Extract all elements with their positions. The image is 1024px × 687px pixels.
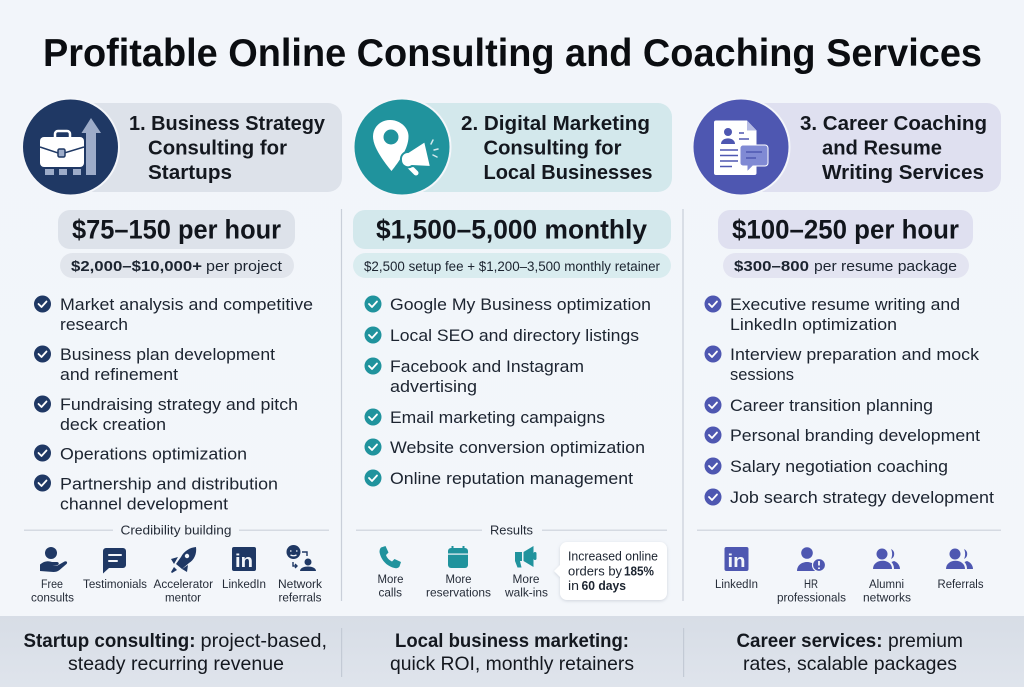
icon: hr professionals: professionals bbox=[777, 590, 846, 604]
service list: digital marketing: Email marketing campaigns bbox=[390, 408, 605, 427]
header: digital marketing bbox=[352, 98, 672, 196]
icon: accelerator mentor: Accelerator bbox=[154, 577, 213, 591]
service list: career coaching: Interview preparation and mock bbox=[730, 345, 980, 364]
service list: digital marketing: advertising bbox=[390, 377, 477, 396]
icon: accelerator mentor bbox=[154, 547, 213, 604]
service list: business strategy: Fundraising strategy and pitch bbox=[60, 395, 298, 414]
service list: digital marketing: Local SEO and directory listings bbox=[390, 326, 639, 345]
service list: career coaching: LinkedIn optimization bbox=[730, 315, 897, 334]
icon: network referrals bbox=[278, 545, 323, 604]
icon: accelerator mentor: mentor bbox=[165, 590, 201, 604]
heading: business strategy bbox=[129, 112, 326, 184]
footer: startup consulting: project-based, bbox=[200, 630, 327, 652]
icon: linkedin: in bbox=[728, 551, 746, 571]
footer: career services bbox=[736, 630, 963, 675]
callout: increased online orders: in bbox=[568, 579, 579, 593]
price: setup fee and retainer: $2,500 setup fee + $1,200–3,500 monthly retainer bbox=[364, 259, 660, 274]
icon: referrals: Referrals bbox=[938, 577, 984, 591]
icon: resume and chat bubble bbox=[692, 98, 790, 196]
service list: career coaching: Salary negotiation coaching bbox=[730, 457, 948, 476]
footer: career services: rates, scalable packages bbox=[743, 653, 957, 675]
header: career coaching bbox=[692, 98, 1001, 196]
service list: business strategy: Business plan development bbox=[60, 345, 275, 364]
footer: startup consulting bbox=[24, 630, 327, 675]
heading: career coaching: Writing Services bbox=[822, 161, 984, 184]
icon: more walk-ins bbox=[504, 546, 548, 600]
heading: digital marketing: Local Businesses bbox=[484, 161, 652, 184]
icon: alumni networks bbox=[863, 548, 911, 604]
service list: digital marketing bbox=[364, 295, 651, 488]
heading: business strategy: 1. Business Strategy bbox=[129, 112, 326, 135]
icon: testimonials bbox=[83, 548, 147, 591]
service list: career coaching: Personal branding development bbox=[730, 426, 980, 445]
footer: startup consulting: steady recurring revenue bbox=[68, 653, 284, 675]
price: setup fee and retainer bbox=[353, 253, 671, 278]
icon: map pin and megaphone bbox=[352, 98, 452, 196]
icon: more reservations bbox=[426, 546, 491, 600]
price: resume package: $300–800 bbox=[734, 258, 809, 275]
price: resume package: per resume package bbox=[814, 258, 957, 275]
service list: business strategy bbox=[34, 295, 313, 514]
service list: career coaching: Executive resume writing and bbox=[730, 295, 960, 314]
heading: business strategy: Consulting for bbox=[148, 136, 287, 160]
icon: free consults: consults bbox=[31, 590, 74, 604]
heading: career coaching bbox=[800, 112, 987, 184]
icon: hr professionals bbox=[777, 547, 846, 604]
service list: digital marketing: Google My Business optimization bbox=[390, 295, 651, 314]
panel: career coaching and resume writing bbox=[692, 98, 1001, 604]
price: monthly rate: $1,500–5,000 monthly bbox=[376, 214, 647, 244]
footer: career services: premium bbox=[888, 630, 963, 652]
service list: business strategy: channel development bbox=[60, 494, 228, 514]
heading: digital marketing: 2. Digital Marketing bbox=[461, 112, 650, 135]
callout: increased online orders: orders by bbox=[568, 564, 623, 578]
icon: alumni networks: Alumni bbox=[869, 577, 904, 591]
panel: business strategy consulting bbox=[21, 98, 342, 604]
price: monthly rate bbox=[353, 210, 671, 249]
icon: hr professionals: HR bbox=[804, 577, 818, 591]
icon: linkedin: in bbox=[235, 551, 253, 571]
footer: local business marketing: quick ROI, monthly retainers bbox=[390, 653, 634, 675]
icon: linkedin bbox=[715, 547, 758, 591]
icon: more reservations: More bbox=[446, 572, 472, 586]
icon: alumni networks: networks bbox=[863, 590, 911, 604]
icon: testimonials: Testimonials bbox=[83, 577, 147, 591]
icon: more calls: More bbox=[378, 572, 404, 586]
footer: local business marketing bbox=[390, 630, 634, 675]
icon: more calls bbox=[378, 546, 404, 600]
service list: career coaching bbox=[704, 295, 994, 507]
heading: career coaching: and Resume bbox=[822, 136, 942, 160]
section: credibility building: Credibility building bbox=[120, 522, 232, 538]
icon: more reservations: reservations bbox=[426, 586, 491, 600]
footer: career services: Career services: bbox=[736, 630, 882, 652]
section: career channels bbox=[697, 530, 1001, 604]
section: results: Results bbox=[490, 522, 533, 538]
icon: linkedin: LinkedIn bbox=[715, 577, 758, 591]
icon: network referrals: Network bbox=[278, 577, 323, 591]
price: resume package bbox=[723, 253, 969, 278]
icon: more calls: calls bbox=[378, 586, 402, 600]
service list: career coaching: sessions bbox=[730, 365, 794, 384]
service list: career coaching: Job search strategy development bbox=[730, 488, 994, 507]
footer: startup consulting: Startup consulting: bbox=[24, 630, 196, 652]
panel: digital marketing consulting bbox=[352, 98, 672, 600]
heading: digital marketing: Consulting for bbox=[484, 136, 622, 160]
heading: digital marketing bbox=[461, 112, 652, 184]
service list: career coaching: Career transition planning bbox=[730, 396, 933, 415]
icon: referrals bbox=[938, 548, 984, 591]
heading: business strategy: Startups bbox=[148, 161, 232, 184]
callout: increased online orders: Increased online bbox=[568, 550, 658, 564]
icon: linkedin: LinkedIn bbox=[222, 577, 266, 591]
price: hourly rate: $75–150 per hour bbox=[72, 214, 281, 244]
service list: digital marketing: Facebook and Instagram bbox=[390, 357, 584, 376]
title: Profitable Online Consulting and Coaching Services bbox=[43, 32, 982, 75]
header: business strategy bbox=[21, 98, 342, 196]
callout: increased online orders: 185% bbox=[624, 564, 654, 578]
callout: increased online orders: 60 days bbox=[582, 579, 626, 593]
icon: more walk-ins: walk-ins bbox=[504, 586, 548, 600]
icon: linkedin bbox=[222, 547, 266, 591]
price: per project: per project bbox=[206, 258, 283, 275]
price: per project bbox=[60, 253, 294, 278]
price: per project: $2,000–$10,000+ bbox=[71, 258, 202, 275]
heading: career coaching: 3. Career Coaching bbox=[800, 112, 987, 135]
section: credibility building bbox=[24, 522, 329, 604]
footer: local business marketing: Local business marketing: bbox=[395, 630, 629, 652]
icon: network referrals: referrals bbox=[278, 590, 322, 604]
section: results bbox=[356, 522, 667, 600]
service list: business strategy: Operations optimization bbox=[60, 444, 247, 464]
service list: business strategy: and refinement bbox=[60, 365, 178, 384]
callout: increased online orders bbox=[554, 542, 667, 600]
service list: business strategy: Partnership and distribution bbox=[60, 474, 278, 494]
icon: free consults: Free bbox=[41, 577, 63, 591]
icon: more walk-ins: More bbox=[512, 572, 540, 586]
service list: digital marketing: Website conversion optimization bbox=[390, 438, 645, 457]
price: hourly rate: $100–250 per hour bbox=[732, 214, 959, 244]
icon: free consults bbox=[31, 547, 74, 604]
footer band bbox=[0, 616, 1024, 687]
service list: digital marketing: Online reputation management bbox=[390, 469, 633, 488]
service list: business strategy: deck creation bbox=[60, 415, 166, 434]
service list: business strategy: Market analysis and competitive bbox=[60, 295, 313, 314]
service list: business strategy: research bbox=[60, 315, 128, 334]
icon: briefcase with growth arrow bbox=[21, 98, 120, 196]
